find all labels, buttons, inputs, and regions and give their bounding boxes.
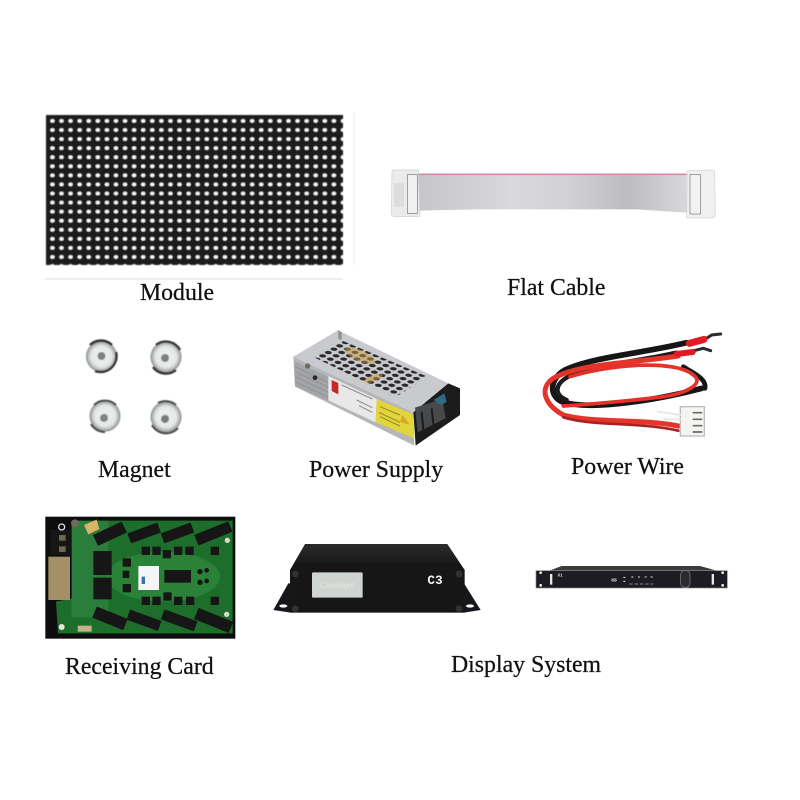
sender lettering: 88	[611, 577, 617, 583]
model name C3: C3	[427, 573, 443, 588]
controller C3	[273, 544, 481, 613]
wire harness	[545, 334, 721, 436]
rack sender X1	[536, 566, 727, 588]
magnets	[86, 341, 182, 433]
panel: receiving card	[45, 517, 235, 680]
sender model: X1	[557, 573, 563, 578]
label: flat cable: Flat Cable	[507, 275, 605, 301]
label: display system: Display System	[451, 652, 602, 678]
panel: power wire	[545, 334, 721, 480]
ribbon cable	[391, 170, 715, 218]
panel: flat cable	[391, 170, 715, 301]
panel: display system	[273, 544, 727, 678]
label: receiving card: Receiving Card	[65, 654, 214, 680]
module board	[46, 115, 343, 265]
label: module: Module	[140, 280, 214, 306]
panel: module	[45, 113, 354, 306]
label: power supply: Power Supply	[309, 457, 443, 483]
panel: magnet	[86, 341, 182, 483]
power supply unit	[293, 330, 460, 446]
controller lettering: Colorlight	[320, 580, 356, 590]
panel: power supply	[293, 330, 460, 483]
label: power wire: Power Wire	[571, 454, 684, 480]
label: magnet: Magnet	[98, 457, 171, 483]
circuit board	[45, 517, 235, 639]
